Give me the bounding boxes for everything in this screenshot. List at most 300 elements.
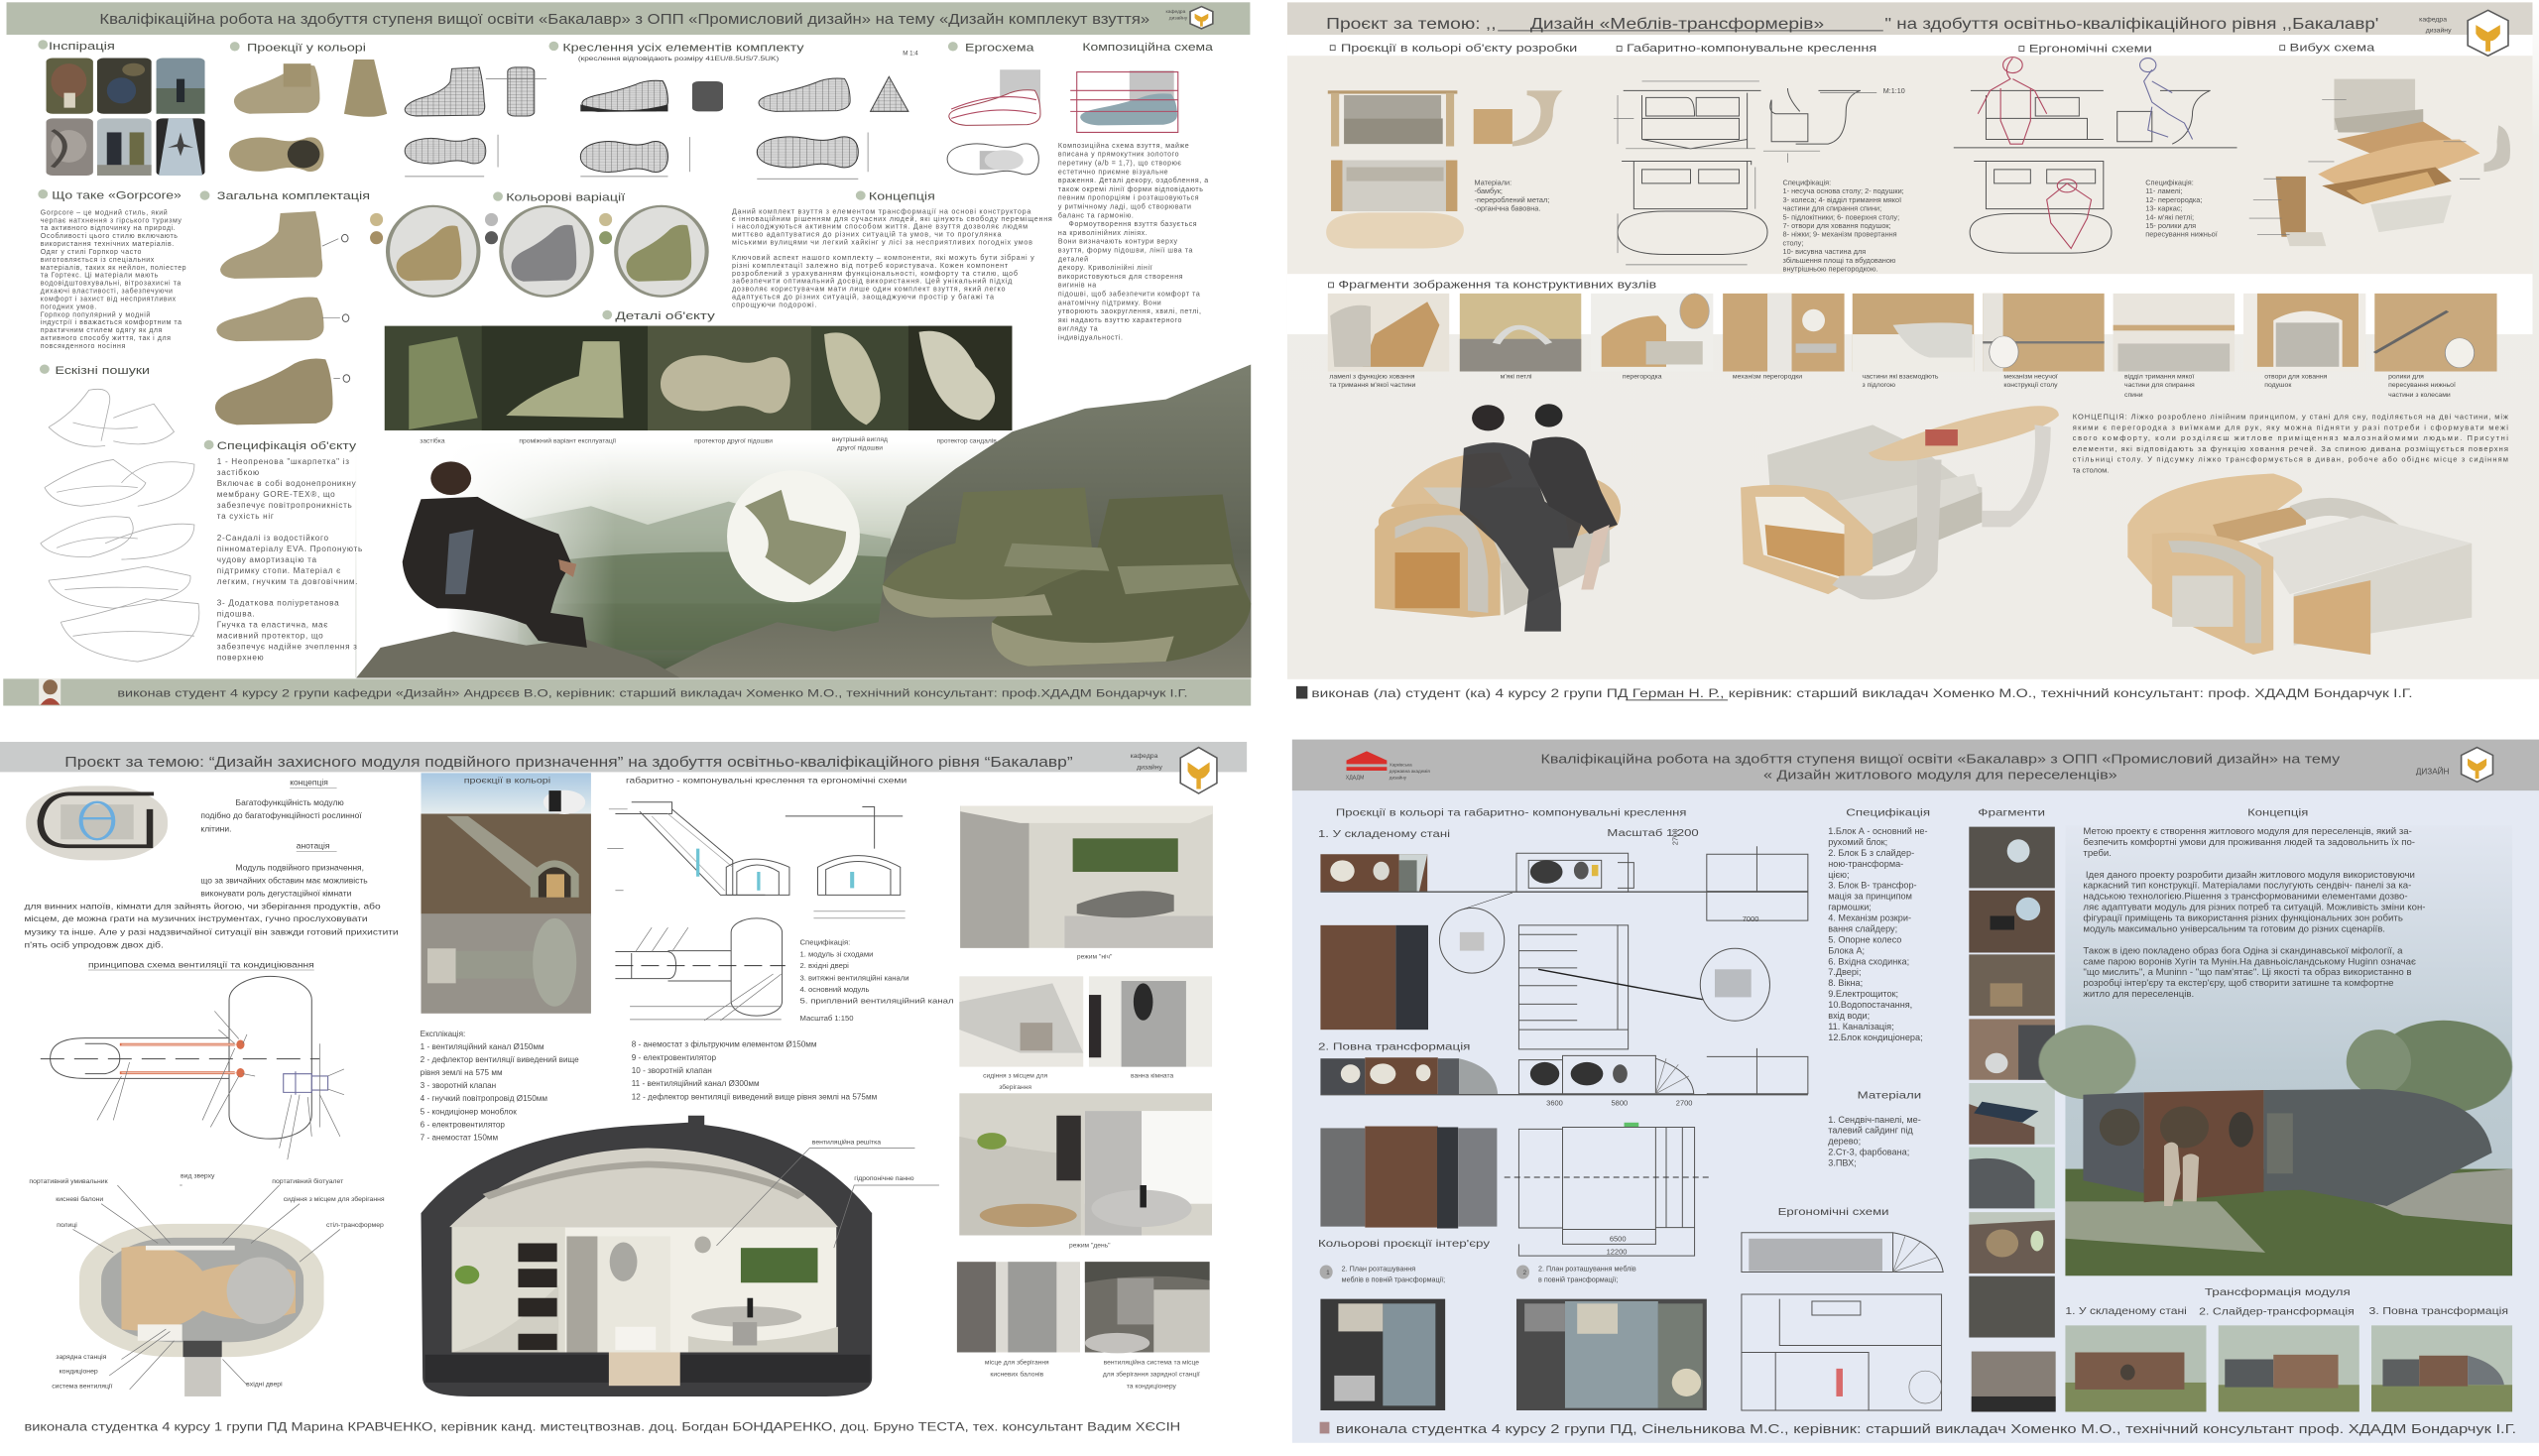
specification list: вхід води; (1828, 1011, 1870, 1021)
oxygen storage and ventilation renders (957, 1262, 1210, 1353)
specification text: 1 - Неопренова "шкарпетка" із (217, 457, 350, 466)
explication list continued: 12 - дефлектор вентиляції виведений вище рівня землі на 575мм (632, 1092, 878, 1101)
specification list: мація за принципом (1828, 892, 1912, 902)
header texts: дизайну (1390, 774, 1407, 780)
composition scheme text: деталей (1058, 255, 1089, 263)
footer text: виконав (ла) студент (ка) 4 курсу 2 групи ПД Герман Н. Р., керівник: старший викладач Хоменко М.О., технічний консультант: проф. ХДАДМ Бондарчук І.Г. (1311, 686, 2413, 700)
day mode render (959, 1093, 1212, 1236)
gorpcore text: матеріалів, таких як нейлон, поліестер (41, 264, 186, 272)
header texts: Кваліфікаційна робота на здобття ступеня вищої освіти «Бакалавр» з ОПП «Промисловий дизайн» на тему (1540, 751, 2341, 766)
drawing captions: габаритно - компонувальні креслення та ергономічні схеми (626, 777, 907, 786)
composition scheme text: Вони визначають контури верху (1058, 239, 1178, 246)
specification text: мембрану GORE-TEX®, що (217, 490, 335, 499)
specification list: 7.Двері; (1828, 967, 1862, 977)
gorpcore text: активного способу життя, так і для (41, 334, 171, 342)
department label: кафедра (1131, 753, 1158, 760)
specification text: 3- Додаткова поліуретанова (217, 599, 339, 608)
title of furniture panel: дизайну (2426, 26, 2452, 34)
concept text: різні комплектації залежно від потреб користувача. Кожен компонент (732, 262, 1009, 270)
ergonomic scheme (947, 69, 1040, 175)
specification text: Включає в собі водонепроникну (217, 479, 357, 488)
specification text: Гнучка та еластична, має (217, 621, 328, 630)
specification list: Блока А; (1828, 945, 1865, 955)
dimensions and plan notes: 12200 (1607, 1248, 1627, 1257)
title of furniture panel: " на здобуття освітньо-кваліфікаційного рівня ,,Бакалавр' (1884, 16, 2378, 33)
main exterior render (2039, 825, 2512, 1275)
detail captions: протектор сандалів (937, 437, 997, 445)
drawing captions: 4. основний модуль (800, 985, 870, 994)
materials list: дерево; (1828, 1137, 1861, 1147)
explication list: 1 - вентиляційний канал Ø150мм (421, 1042, 544, 1051)
dimensions and plan notes: меблів в повній трансформації; (1342, 1275, 1445, 1283)
detail captions: застібка (420, 437, 445, 445)
specification list: 8. Вікна; (1828, 978, 1863, 988)
gorpcore text: повсякденного носіння (41, 342, 126, 350)
render captions: кисневих балонів (990, 1370, 1044, 1378)
specification text: застібкою (217, 468, 260, 477)
title of module panel: Проєкт за темою: “Дизайн захисного модуля подвійного призначення” на здобуття освітньо-кваліфікаційного рівня “Бакалавр” (64, 754, 1073, 771)
explication list: 7 - анемостат 150мм (421, 1133, 498, 1142)
set components shoes (215, 211, 350, 425)
gorpcore text: та Гортекс. Ці матеріали мають (41, 272, 159, 280)
fragment captions: отвори для ховання (2264, 374, 2328, 381)
plan labels: портативний біотуалет (272, 1177, 344, 1185)
concept text: житло для переселенців. (2083, 989, 2194, 1000)
concept text: та столом. (2073, 465, 2109, 474)
composition scheme text: анатомічну підтримку. Вони (1058, 299, 1161, 306)
inset circle with transforming shoe (727, 470, 860, 602)
plan labels: стіл-трансформер (326, 1221, 384, 1229)
specification list: 3. Блок В- трансфор- (1828, 881, 1917, 891)
fragment captions: частини для спирання (2124, 382, 2195, 389)
specification list two: 14- м'які петлі; (2145, 212, 2194, 221)
concept and annotation text: для винних напоїв, кімнати для зайнять йогою, чи зберігання продуктів, або (24, 901, 381, 910)
plan labels: сидіння з місцем для зберігання (284, 1195, 385, 1203)
concept and annotation text: Модуль подвійного призначення, (236, 863, 364, 873)
sofa render with seated people (1375, 404, 1621, 632)
fragment captions: спини (2124, 392, 2143, 399)
render captions: гідропонічне панно (854, 1174, 914, 1182)
concept text: ляє адаптувати модуль для різних потреб та ситуацій. Можливість зміни кон- (2083, 903, 2425, 913)
concept and annotation text: виконувати роль дегустаційної кімнати (200, 888, 352, 898)
concept text: і насолоджуються активним способом життя. Дане взуття дозволяє людям (732, 223, 1028, 231)
underground colour projection (421, 773, 591, 1014)
folded state elevation and drawings (1320, 846, 1808, 920)
headings: Концепція (869, 190, 935, 202)
headings: Що таке «Gorpcore» (52, 190, 181, 202)
composition scheme text: вигинів на (1058, 282, 1097, 290)
render captions (812, 953, 1200, 1391)
specification list: 10.Водопостачання, (1828, 1000, 1912, 1010)
headings: Інспірація (49, 41, 115, 53)
section headings: Кольорові проєкції інтер'єру (1318, 1239, 1491, 1250)
fragment captions: подушок (2264, 382, 2292, 389)
specification list one: 1- несуча основа столу; 2- подушки; (1783, 186, 1904, 195)
drawing captions (464, 777, 954, 1023)
footer text: виконав студент 4 курсу 2 групи кафедри «Дизайн» Андрєєв В.О, керівник: старший викладач Хоменко М.О., технічний консультант: проф.ХДАДМ Бондарчук І.Г. (117, 687, 1188, 699)
fragment captions: перегородка (1623, 374, 1662, 381)
concept text: "що мислить", а Muninn - "що пам'ятає". Ці якості та образ використанно в (2083, 967, 2411, 978)
dimensions and plan notes: 2. План розташування меблів (1538, 1266, 1636, 1274)
fragment captions (1329, 373, 2456, 399)
composition scheme (1070, 70, 1178, 132)
composition scheme text: на криволінійних лініях. (1058, 229, 1148, 237)
text group: footwear panel (41, 41, 1214, 699)
section headings: Фрагменти (1978, 808, 2045, 819)
specification list two: Специфікація: (2145, 178, 2194, 186)
plan labels: система вентиляції (52, 1383, 112, 1391)
concept and annotation text: анотація (297, 841, 330, 851)
specification text: поверхнею (217, 654, 264, 663)
dimensions and plan notes: 5800 (1611, 1098, 1628, 1107)
drawing captions: 5. приплвний вентиляційний канал (800, 997, 954, 1006)
people (1460, 404, 1618, 632)
specification list: 4. Механізм розкри- (1828, 913, 1911, 923)
fragment captions: пересування нижньої (2388, 382, 2456, 389)
gorpcore text: Горпкор популярний у модній (41, 310, 151, 318)
footer band and author portrait (3, 678, 1251, 706)
explication list continued: 9 - електровентилятор (632, 1053, 716, 1062)
composition scheme text: враження. Деталі декору, оздоблення, а (1058, 177, 1209, 184)
specification list: 11. Каналізація; (1828, 1022, 1894, 1031)
plan markers (1320, 1265, 1529, 1279)
specification list one: 8- ніжки; 9- механізм провертання (1783, 230, 1897, 239)
specification text: підошва. (217, 610, 255, 619)
concept and annotation text: Багатофункційність модулю (236, 797, 344, 807)
fragment captions: механізм несучої (2003, 373, 2058, 381)
header texts (1346, 751, 2450, 783)
specification list: 1.Блок А - основний не- (1828, 826, 1928, 836)
concept and annotation text: п'ять осіб упродовж двох діб. (24, 939, 164, 949)
fragment captions: відділ тримання мякої (2124, 373, 2194, 381)
render captions: режим "день" (1069, 1242, 1111, 1249)
plan labels: кисневі балони (56, 1195, 103, 1203)
title of furniture panel: Дизайн «Меблів-трансформерів» (1530, 16, 1824, 33)
concept text: спрощуючи подорожі. (732, 302, 817, 309)
header texts: Харківська (1390, 762, 1412, 767)
fragment captions: ролики для (2388, 374, 2424, 381)
headings: Креслення усіх елементів комплекту (562, 42, 804, 54)
fragment captions: м'які петлі (1501, 373, 1532, 381)
header band with title: дизайну (1169, 15, 1188, 22)
specification list: вання слайдеру; (1828, 923, 1897, 933)
plan labels: вхідні двері (246, 1381, 283, 1389)
explication list: 2 - дефлектор вентиляції виведений вище (421, 1055, 579, 1064)
concept text: КОНЦЕПЦІЯ: Ліжко розроблено лінійним принципом, у стані для сну, поділяється на дві частини, між (2073, 413, 2508, 422)
panel: dual-purpose protective module project (0, 742, 1247, 1433)
detail captions: внутрішній вигляд (832, 435, 888, 443)
concept text: саме парою воронів Хугін та Мунін.На давньоісландському Huginn означає (2083, 956, 2416, 967)
header texts: державна академія (1390, 769, 1430, 774)
transformation thumbnails (2065, 1325, 2512, 1411)
sketches (41, 389, 199, 662)
section headings: Вибух схема (2290, 42, 2374, 54)
section headings: Специфікація (1846, 807, 1930, 819)
sofa render as bed (2127, 473, 2472, 655)
headings: Композиційна схема (1082, 42, 1214, 54)
drawing captions: Специфікація: (800, 938, 850, 947)
composition scheme text: утворюють заокруглення, хвилі, петлі, (1058, 307, 1202, 315)
concept text: надською технологією.Рішення з трансформованими елементами дозво- (2083, 892, 2408, 903)
dimensions and plan notes: 7000 (1743, 914, 1758, 923)
concept and annotation text: концепція (290, 778, 328, 788)
concept text: Також в ідею покладено образ бога Одіна зі скандинавської міфології, а (2083, 945, 2403, 956)
title of furniture panel: кафедра (2419, 16, 2447, 23)
specification list: 6. Вхідна сходинка; (1828, 956, 1909, 966)
gorpcore text: Одяг у стилі Горпкор часто (41, 248, 142, 256)
materials note: -бамбук; (1475, 186, 1503, 195)
concept and annotation text: музику та інше. Але у разі надзвичайної ситуації він завжди готовий прихистити (24, 926, 399, 936)
dimensions and plan notes: 2700 (1676, 1098, 1692, 1107)
dimensions and plan notes: 2700 (1670, 829, 1679, 845)
explication list: Експлікація: (421, 1030, 465, 1038)
header band with title: Кваліфікаційна робота на здобуття ступеня вищої освіти «Бакалавр» з ОПП «Промисловий дизайн» на тему «Дизайн комплекут взуття» (99, 11, 1149, 28)
detail captions: другої підошви (837, 444, 883, 452)
dimensions and plan notes: 3600 (1546, 1098, 1563, 1107)
detail captions: проміжний варіант експлуатації (519, 437, 616, 445)
renders seat and bathroom (959, 976, 1212, 1067)
concept and annotation text (24, 778, 399, 970)
full transformation elevation (1320, 1048, 1808, 1095)
composition scheme text: певним пропорціям і розташовуються (1058, 194, 1199, 202)
dimensional drawings of sofa (1614, 81, 1876, 265)
concept and annotation text: подібно до багатофункційності рослинної (200, 810, 362, 820)
section headings: Трансформація модуля (2205, 1286, 2351, 1298)
concept text: розробці інтер'єру та екстер'єру, щоб створити затишне та комфортне (2083, 978, 2394, 989)
composition scheme text: вписана у прямокутник золотого (1058, 152, 1179, 159)
section headings: Проєкції в кольорі об'єкту розробки (1341, 43, 1577, 55)
materials list: 2.Ст-3, фарбована; (1828, 1148, 1909, 1157)
interior plans (1320, 1299, 1707, 1410)
section headings: Ергономічні схеми (1778, 1207, 1888, 1218)
explication list: 6 - електровентилятор (421, 1120, 505, 1129)
specification text: пінноматеріалу EVA. Пропонують (217, 545, 363, 553)
gorpcore text: практичним стилем одягу як для (41, 327, 163, 334)
plan labels: кондиціонер (60, 1368, 98, 1376)
composition scheme text: перетину (a/b = 1,7), що створює (1058, 161, 1182, 168)
specification list two: пересування нижньої (2145, 230, 2218, 239)
drawing captions: 3. витяжні вентиляційні канали (800, 973, 909, 982)
drawing captions: проєкції в кольорі (464, 777, 550, 786)
concept text: каркасний тип конструкції. Матеріалами послугують сендвіч- панелі за ка- (2083, 881, 2411, 892)
specification list one: 3- колеса; 4- відділ тримання мякої (1783, 195, 1901, 204)
header texts: ХДАДМ (1346, 775, 1364, 781)
gorpcore text: використання технічних матеріалів. (41, 240, 175, 248)
composition scheme text: використовуються для створення (1058, 274, 1183, 281)
concept text: розроблений з урахуванням функціональності, комфорту та стилю, щоб (732, 270, 1019, 278)
composition scheme text: індивідуальності. (1058, 334, 1124, 342)
specification text: забезпечує повітропроникність (217, 501, 352, 510)
specification text: масивний протектор, що (217, 632, 323, 641)
dimensions and plan notes: 1 (1326, 1270, 1330, 1276)
specification text: підтримку стопи. Матеріал є (217, 566, 341, 575)
concept text: безпечить комфортні умови для проживання людей та задовольнить їх по- (2083, 837, 2415, 848)
gorpcore text: Gorpcore – це модний стиль, який (41, 208, 168, 216)
headings: Ергосхема (965, 42, 1034, 54)
concept text: стільниці столу. У підсумку ліжко трансформується в диван, робоче або обіднє місце з сидінням (2073, 455, 2508, 464)
drawing captions: Масштаб 1:150 (800, 1014, 854, 1023)
specification list two: 12- перегородка; (2145, 195, 2202, 204)
concept and annotation text: місцем, де можна грати на музичних інструментах, гучно прослуховувати (24, 913, 368, 923)
section headings: Концепція (2247, 808, 2308, 819)
composition scheme text: які надають взуттю характерного (1058, 316, 1182, 324)
concept text: Ключовий аспект нашого комплекту – компоненти, які можуть бути зібрані у (732, 254, 1034, 262)
night mode render (960, 806, 1213, 948)
panel: housing module for displaced people project (1292, 740, 2539, 1443)
roof plan folded (1320, 893, 1769, 1049)
explication list continued: 11 - вентиляційний канал Ø300мм (632, 1079, 760, 1088)
plan labels (29, 1173, 385, 1391)
gorpcore text: індустрії і вважається комфортним та (41, 318, 182, 326)
specification list: гармошки; (1828, 903, 1872, 912)
section markers (38, 40, 958, 449)
plan labels: полиці (57, 1221, 77, 1229)
specification list one: столу; (1783, 238, 1803, 247)
department label: дизайну (1137, 764, 1162, 772)
explication list continued: 8 - анемостат з фільтруючим елементом Ø150мм (632, 1040, 817, 1049)
headings: Кольорові варіації (506, 191, 626, 203)
section and plan drawings (607, 802, 906, 1021)
specification list: 9.Електрощиток; (1828, 989, 1898, 999)
section headings: Проєкції в кольорі та габаритно- компонувальні креслення (1336, 807, 1686, 819)
specification text: 2-Сандалі із водостійкого (217, 534, 329, 543)
specification list one: 5- підлокітники; 6- поверхня столу; (1783, 212, 1899, 221)
section headings: Матеріали (1858, 1090, 1921, 1101)
exploded view (2249, 79, 2510, 246)
panel background and header (1292, 740, 2539, 1443)
concept text: адаптується до різних ситуацій, заощаджуючи простір у багажі та (732, 294, 995, 302)
specification text: та сухість ніг (217, 512, 274, 521)
header band with title (7, 2, 1250, 35)
ergonomic schemes (1954, 58, 2237, 253)
concept text: якими є перегородка з виїмками для рук, яку можна підняти у разі потреби і сформувати межі (2073, 423, 2508, 431)
specification list one: 7- отвори для ховання подушок; (1783, 221, 1891, 230)
composition scheme text: вигляду та (1058, 326, 1098, 333)
technical drawings of shoes (405, 67, 908, 179)
concept text: міськими вулицями чи легкий хайкінг у лісі за несприятливих погодніх умов (732, 238, 1033, 246)
title of furniture panel (1326, 16, 2452, 34)
specification list two: 11- ламелі; (2145, 186, 2183, 195)
concept text: треби. (2083, 848, 2112, 859)
concept text (2073, 413, 2508, 474)
gorpcore text: виготовляється із спеціальних (41, 256, 155, 264)
central cross-section render (421, 1116, 939, 1396)
concept text: миттєво адаптуватися до різних ситуацій та умов, чи то прогулянка (732, 230, 1002, 238)
fragments column (1969, 827, 2056, 1411)
composition scheme text: Формоутворення взуття базується (1069, 220, 1197, 228)
ergonomic schemes (1742, 1233, 1943, 1410)
gorpcore text: та активного відпочинку на природі. (41, 224, 176, 232)
colour projections of shoe (229, 60, 387, 172)
composition scheme text: баланс та гармонію. (1058, 211, 1134, 219)
render captions: режим "ніч" (1077, 953, 1113, 961)
materials list: талевий сайдинг під (1828, 1126, 1913, 1136)
landscape with rock, hiker and boots (356, 364, 1251, 677)
gorpcore text: дихаючі властивості, забезпечуючи (41, 288, 174, 296)
plan labels: портативний умивальник (29, 1177, 109, 1185)
concept text: фігурації приміщень та використання різних функціональних зон робить (2083, 913, 2403, 924)
render captions: сидіння з місцем для (983, 1072, 1048, 1080)
concept text: Ідея даного проекту розробити дизайн житлового модуля використовуючи (2086, 870, 2415, 881)
plan labels: вид зверху (181, 1173, 215, 1180)
author portrait (1320, 1422, 1329, 1433)
composition scheme text: взуття, форму підошви, лінії шва та (1058, 247, 1193, 255)
render captions: зберігання (999, 1083, 1031, 1091)
drawing captions: 1. модуль зі сходами (800, 949, 873, 958)
headings: Специфікація об'єкту (217, 440, 357, 452)
composition scheme text: естетично приємне візуальне (1058, 168, 1168, 176)
dimensions and plan notes: 6500 (1610, 1234, 1627, 1243)
fragment captions: та тримання м'якої частини (1329, 382, 1416, 389)
gorpcore text: погодних умов. (41, 303, 97, 310)
specification text: чудову амортизацію та (217, 555, 317, 564)
section headings: 3. Повна трансформація (2369, 1305, 2508, 1317)
fragment captions: частини з колесами (2388, 392, 2451, 399)
section headings: 2. Слайдер-трансформація (2199, 1306, 2355, 1318)
dimensions and plan notes: 2 (1523, 1270, 1527, 1276)
specification list one: Специфікація: (1783, 178, 1831, 186)
header band (1287, 2, 2532, 334)
specification list two: 13- каркас; (2145, 204, 2183, 213)
composition scheme text: декору. Криволінійні лінії (1058, 264, 1152, 272)
specification list: 5. Опорне колесо (1828, 934, 1901, 944)
specification list one: 10- висувна частина для (1783, 247, 1866, 256)
materials list: 1. Сендвіч-панелі, ме- (1828, 1115, 1921, 1125)
specification text: забезпечує надійне зчеплення з (217, 643, 358, 652)
explication list: 3 - зворотній клапан (421, 1081, 496, 1090)
render captions: для зберігання зарядної станції (1103, 1370, 1200, 1378)
specification list: 2. Блок Б з слайдер- (1828, 848, 1914, 858)
module logo (26, 786, 168, 860)
materials note: -перероблений метал; (1475, 195, 1549, 204)
specification list one: частини для спирання спини; (1783, 204, 1881, 213)
section headings: 2. Повна трансформація (1318, 1041, 1470, 1053)
header band with title: кафедра (1166, 9, 1186, 15)
render captions: місце для зберігання (985, 1359, 1049, 1367)
section headings (1329, 42, 2374, 291)
section headings: Масштаб 1:200 (1607, 827, 1699, 839)
fragment tiles (1328, 294, 2497, 372)
colour variations (370, 206, 707, 297)
concept text: модуль максимально універсальним та готовим до різних сценаріїв. (2083, 923, 2385, 934)
materials note: -органічна бавовна. (1475, 204, 1540, 213)
section headings: М:1:10 (1883, 87, 1905, 95)
detail captions: протектор другої підошви (694, 437, 773, 445)
dimensions and plan notes: 2. План розташування (1342, 1266, 1415, 1274)
concept text: є інноваційним рішенням для сучасних людей, які цінують свободу переміщення (732, 215, 1053, 223)
footer text: виконала студентка 4 курсу 2 групи ПД, Сінельникова М.С., керівник: старший викладач Хоменко М.О., технічний консультант проф. ХДАДМ Бондарчук І.Г. (1336, 1421, 2516, 1436)
roof plan transformed (1320, 1123, 1711, 1256)
specification list one: збільшення площі та вбудованою (1783, 256, 1896, 265)
concept text: Даний комплект взуття з елементом трансформації на основі конструктора (732, 208, 1031, 216)
gorpcore text: комфорт і захист від несприятливих (41, 295, 177, 303)
gorpcore text: Особливості цього стилю включають (41, 232, 179, 240)
footer icon (1296, 686, 1307, 699)
detail captions (420, 435, 997, 452)
composition scheme text: Композиційна схема взуття, майже (1058, 142, 1189, 150)
fragment captions: частини які взаємодіють (1863, 373, 1939, 381)
concept text: елементи, які відповідають за функцію ховання речей. За спиною дивана розміщується поверхня (2073, 444, 2508, 453)
inspiration photo grid (47, 59, 205, 176)
headings: Ескізні пошуки (56, 365, 150, 377)
explication list: 4 - гнучкий повітропровід Ø150мм (421, 1094, 547, 1103)
specification list: рухомий блок; (1828, 837, 1887, 847)
dimensions and plan notes (1326, 829, 1758, 1283)
plan labels: зарядна станція (56, 1353, 107, 1361)
gorpcore text: водовідштовхувальні, вітрозахисні та (41, 280, 181, 288)
colour projections of sofa (1326, 90, 1563, 248)
specification text: легким, гнучким та довговічним. (217, 577, 358, 586)
